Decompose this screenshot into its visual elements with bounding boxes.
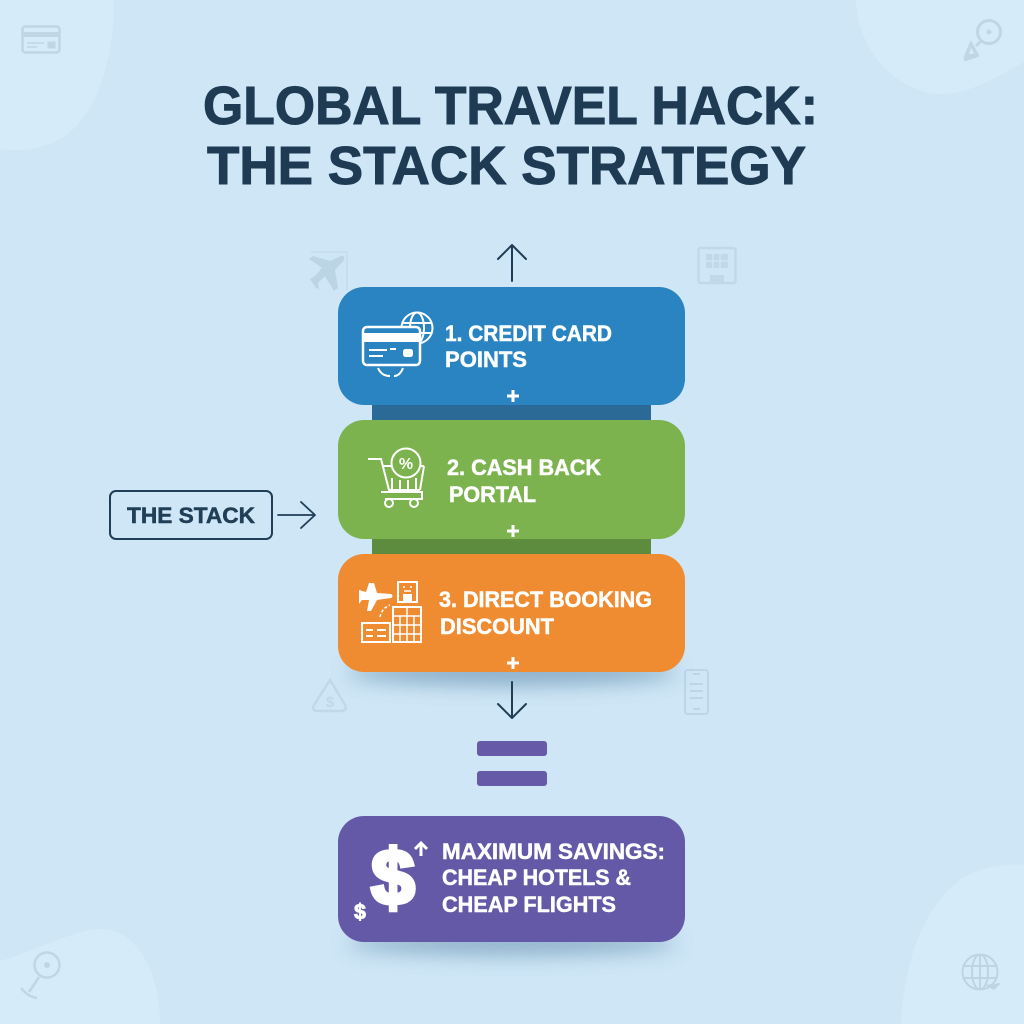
icon: faded pin bottom left: [21, 952, 60, 998]
shadow: result card: [347, 931, 677, 955]
connector: blue to green: [372, 400, 651, 425]
text: credit card label: POINTS: [445, 347, 527, 372]
text: cash back label: [447, 455, 602, 507]
text: maximum savings label: [442, 839, 665, 917]
icon: cart with percent: %: [399, 456, 413, 473]
title: GLOBAL TRAVEL HACK:: [203, 76, 818, 136]
icon: dollar signs with arrow: $: [371, 833, 415, 921]
text: credit card label: [445, 321, 612, 372]
text: cash back label: PORTAL: [449, 482, 536, 507]
icon: faded warning dollar: [313, 680, 346, 711]
panel: cash back portal: [338, 420, 685, 539]
label: the stack: [110, 491, 272, 539]
arrow: the stack to cards: [278, 502, 315, 528]
text: direct booking label: [439, 587, 652, 639]
title: THE STACK STRATEGY: [207, 136, 806, 196]
equals sign: [477, 741, 547, 786]
icon: faded building: [698, 248, 736, 283]
icon: faded credit card: [22, 26, 60, 52]
panel: credit card points: [338, 287, 685, 405]
icon: credit card and globe: [363, 312, 432, 376]
label: the stack: THE STACK: [127, 503, 256, 528]
text: maximum savings label: MAXIMUM SAVINGS:: [442, 839, 665, 864]
shadow: orange card: [347, 659, 677, 685]
arrow: down: [498, 682, 526, 718]
icon: cart with percent: [368, 448, 424, 507]
text: direct booking label: 3. DIRECT BOOKING: [439, 587, 652, 612]
plus: [507, 525, 519, 537]
text: credit card label: 1. CREDIT CARD: [445, 321, 612, 346]
icon: faded phone: [685, 670, 708, 714]
panel: direct booking discount: [338, 554, 685, 672]
connector: green to orange: [372, 534, 651, 559]
icon: faded globe: [962, 954, 1001, 990]
text: cash back label: 2. CASH BACK: [447, 455, 602, 480]
icon: faded location pin top right: [964, 20, 1000, 60]
icon: dollar signs with arrow: [354, 833, 427, 924]
icon: plane, hotel and ticket: [359, 582, 421, 642]
text: direct booking label: DISCOUNT: [440, 614, 554, 639]
text: maximum savings label: CHEAP HOTELS &: [442, 865, 631, 890]
icon: faded airplane: [309, 252, 347, 291]
plus: [507, 657, 519, 669]
text: maximum savings label: CHEAP FLIGHTS: [442, 892, 616, 917]
icon: faded warning dollar: $: [326, 694, 335, 711]
title: [203, 76, 818, 196]
plus: [507, 390, 519, 402]
panel: maximum savings: [338, 816, 685, 942]
icon: dollar signs with arrow: $: [354, 901, 366, 924]
arrow: up: [498, 245, 526, 281]
